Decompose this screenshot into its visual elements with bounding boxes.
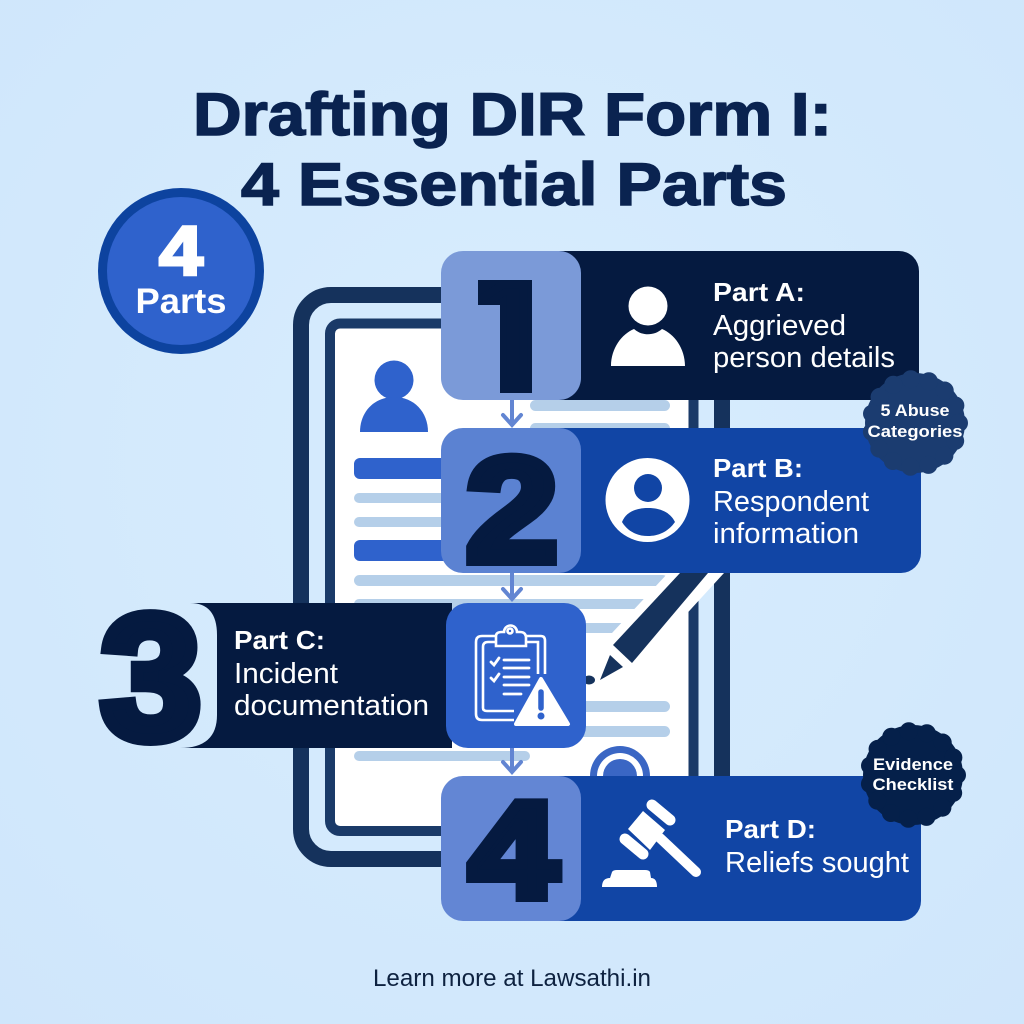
text: part B [713, 453, 869, 550]
seal: 5 abuse categories: 5 Abuse [880, 401, 950, 420]
text: part C [234, 625, 429, 722]
icon: person [611, 286, 685, 366]
number tile 1 [441, 251, 581, 400]
number tile 2 [441, 428, 581, 593]
panel: part B [441, 428, 921, 593]
badge: 4 parts: Parts [136, 282, 226, 321]
stamp seal [590, 746, 650, 806]
panel: part D [441, 774, 921, 926]
form avatar icon [360, 360, 428, 432]
icon: profile circle [606, 458, 690, 542]
footer: Learn more at Lawsathi.in [373, 965, 651, 992]
arrow: step 3 to 4 [503, 746, 521, 772]
badge: 4 parts [98, 188, 264, 354]
illustration: form document on clipboard [301, 295, 724, 859]
text: part A: Aggrieved [713, 310, 846, 342]
seal: evidence checklist [863, 725, 963, 825]
badge: 4 parts: 4 [159, 212, 203, 290]
arrow: step 1 to 2 [503, 398, 521, 425]
panel: part A [441, 251, 919, 400]
text: part D: Part D: [725, 814, 816, 844]
title: 4 Essential Parts [241, 151, 787, 218]
number tile 1: 1 [467, 252, 551, 422]
icon tile: clipboard with warning [446, 603, 586, 748]
text: part A: person details [713, 342, 895, 374]
text: part C: Incident [234, 658, 338, 690]
seal: evidence checklist: Checklist [872, 775, 954, 794]
text: part C: documentation [234, 690, 429, 722]
text: part D: Reliefs sought [725, 847, 909, 879]
text: part A [713, 277, 895, 374]
text: part B: information [713, 518, 859, 550]
text: part B: Part B: [713, 453, 803, 483]
title: Drafting DIR Form I: [193, 81, 832, 148]
text: part C: Part C: [234, 625, 325, 655]
seal: 5 abuse categories: Categories [868, 422, 962, 441]
pen [583, 573, 724, 690]
number tile 2: 2 [466, 428, 558, 593]
text: part B: Respondent [713, 486, 869, 518]
text: part D [725, 814, 909, 879]
text: part A: Part A: [713, 277, 805, 307]
form lines [354, 400, 670, 761]
number tile 4: 4 [470, 774, 558, 926]
icon: gavel [602, 805, 696, 887]
panel: part C [101, 580, 586, 776]
seal: 5 abuse categories [865, 373, 965, 473]
number tile 4 [441, 774, 581, 926]
seal: evidence checklist: Evidence [873, 755, 953, 774]
arrow: step 2 to 3 [503, 571, 521, 599]
number 3: 3 [101, 580, 201, 776]
title [193, 81, 832, 218]
